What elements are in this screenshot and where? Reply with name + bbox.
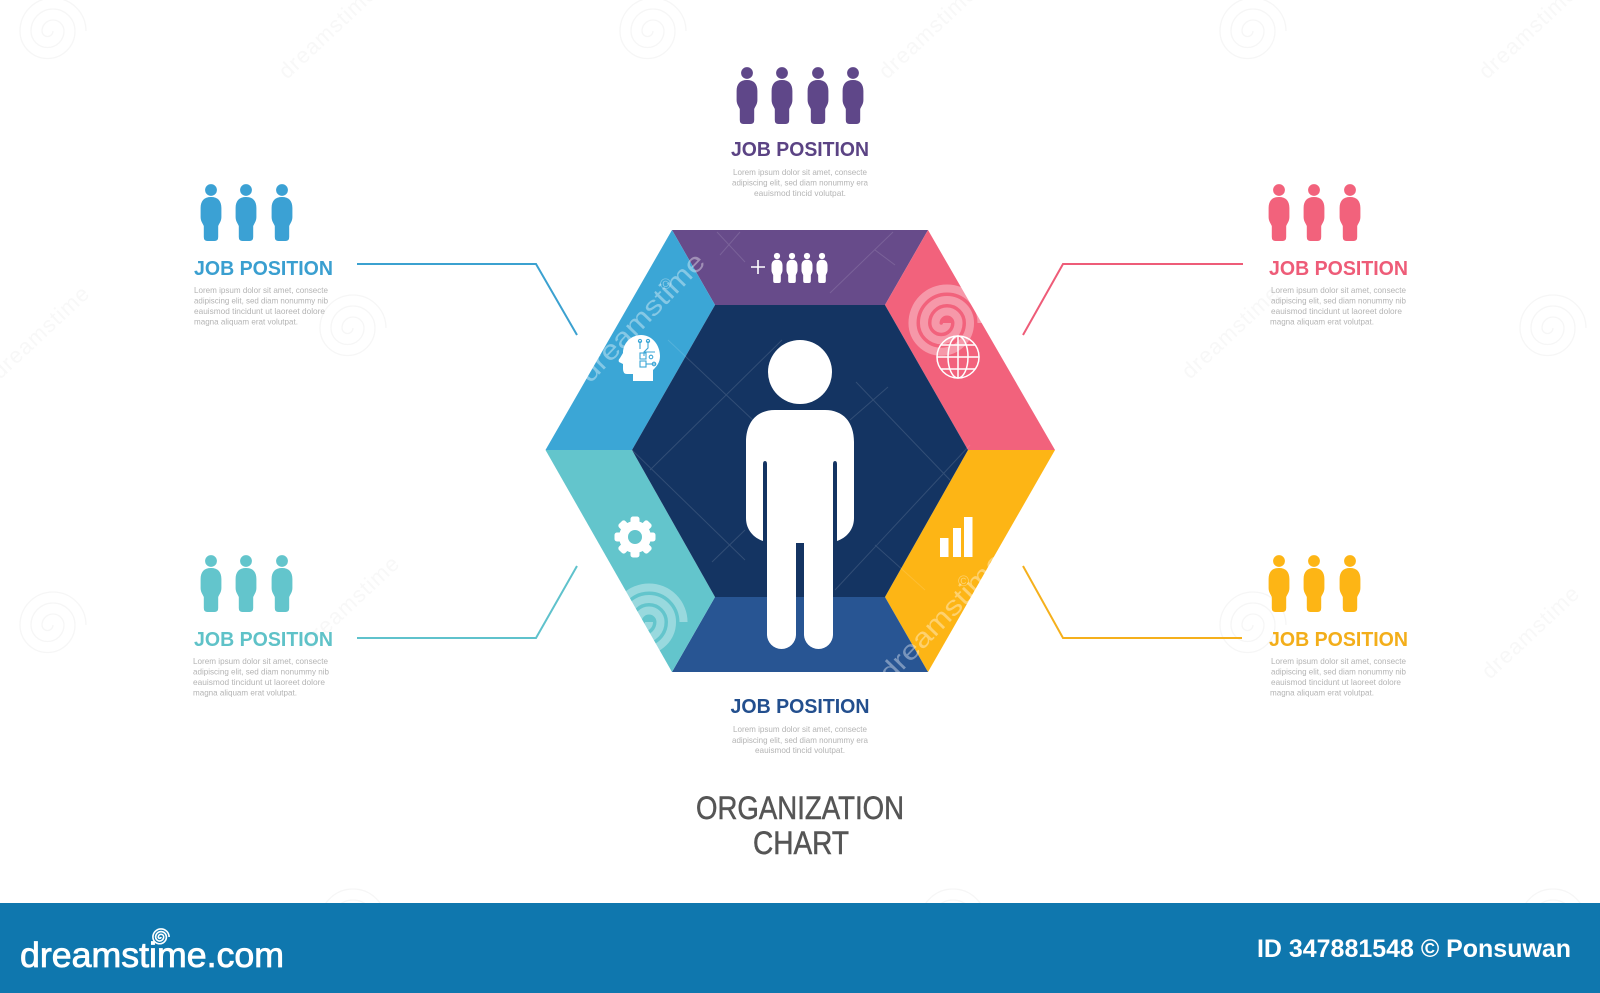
watermark text on blue: dreamstime (573, 246, 711, 388)
icon: central person (746, 340, 854, 649)
watermark spiral on teal (614, 588, 684, 651)
block: lower right job position (1023, 555, 1408, 698)
watermark spiral on pink (912, 288, 982, 352)
text block: eauismod tincid volutpat. (754, 188, 846, 198)
text block: adipiscing elit, sed diam nonummy nib (193, 666, 329, 676)
title: CHART (753, 825, 849, 861)
text block: magna aliquam erat volutpat. (1270, 688, 1374, 698)
text block: magna aliquam erat volutpat. (1270, 316, 1374, 326)
icon: globe (937, 336, 979, 378)
text block: adipiscing elit, sed diam nonummy era (732, 735, 868, 745)
text block: eauismod tincid volutpat. (755, 745, 845, 755)
segment: navy centre (632, 305, 968, 597)
segment: blue upper left (546, 230, 715, 450)
text block (1270, 656, 1406, 698)
text block: Lorem ipsum dolor sit amet, consecte (1271, 656, 1406, 666)
heading: JOB POSITION (194, 258, 333, 280)
icon: bar chart (940, 517, 972, 557)
text block (194, 285, 328, 326)
heading: JOB POSITION (1269, 258, 1408, 280)
text block: Lorem ipsum dolor sit amet, consecte (733, 724, 867, 734)
watermark copyright on blue: © (660, 276, 671, 293)
background watermark pattern: dreamstime (296, 550, 405, 654)
block: bottom job position (730, 696, 870, 755)
icon: three people blue (201, 184, 292, 241)
segment: pink upper right (885, 230, 1055, 450)
text block: Lorem ipsum dolor sit amet, consecte (193, 656, 328, 666)
text block: Lorem ipsum dolor sit amet, consecte (733, 167, 867, 177)
text block (1270, 285, 1406, 326)
text block (732, 167, 868, 198)
text block (732, 724, 868, 755)
text block: eauismod tincidunt ut laoreet dolore (193, 677, 325, 687)
text block: Lorem ipsum dolor sit amet, consecte (194, 285, 328, 295)
icon: head with circuit (619, 335, 660, 381)
heading: JOB POSITION (730, 696, 870, 718)
text block: adipiscing elit, sed diam nonummy nib (194, 296, 328, 306)
heading: JOB POSITION (731, 139, 869, 161)
block: top job position (731, 67, 869, 198)
watermark lines on hexagon (632, 232, 970, 590)
segment: purple top (672, 230, 928, 305)
title (696, 790, 904, 861)
segment: gold lower right (885, 450, 1055, 672)
text block: adipiscing elit, sed diam nonummy nib (1271, 296, 1406, 306)
icon: three people pink (1269, 184, 1360, 241)
icon: three people gold (1269, 555, 1360, 612)
block: upper right job position (1023, 184, 1408, 335)
hexagon diagram (546, 230, 1055, 688)
heading: JOB POSITION (194, 629, 333, 651)
text block: magna aliquam erat volutpat. (194, 316, 298, 326)
footer logo: dreamstime.com (20, 936, 284, 975)
heading: JOB POSITION (1269, 629, 1408, 651)
block: lower left job position (193, 555, 577, 698)
watermark copyright on gold: © (958, 573, 969, 590)
connector line (357, 264, 577, 335)
connector line (357, 566, 577, 638)
icon: four people purple (737, 67, 863, 124)
text block (193, 656, 329, 698)
segment: teal lower left (546, 450, 715, 672)
footer bar (0, 903, 1600, 993)
text block: eauismod tincidunt ut laoreet dolore (1271, 677, 1401, 687)
icon: plus and four people (751, 253, 828, 283)
background watermark pattern: dreamstime (1476, 580, 1585, 684)
title: ORGANIZATION (696, 790, 904, 826)
footer credit: ID 347881548 © Ponsuwan (1257, 935, 1571, 963)
icon: three people teal (201, 555, 292, 612)
segment: dark blue bottom (672, 597, 928, 672)
text block: Lorem ipsum dolor sit amet, consecte (1271, 285, 1406, 295)
text block: adipiscing elit, sed diam nonummy nib (1271, 666, 1406, 676)
icon: gear (614, 516, 656, 558)
text block: eauismod tincidunt ut laoreet dolore (1271, 306, 1402, 316)
text block: magna aliquam erat volutpat. (193, 688, 297, 698)
connector line (1023, 264, 1243, 335)
block: upper left job position (194, 184, 577, 335)
text block: eauismod tincidunt ut laoreet dolore (194, 306, 325, 316)
connector line (1023, 566, 1242, 638)
watermark text on gold: dreamstime (873, 546, 1011, 688)
text block: adipiscing elit, sed diam nonummy era (732, 178, 868, 188)
background watermark pattern: dreamstime (1176, 280, 1285, 384)
